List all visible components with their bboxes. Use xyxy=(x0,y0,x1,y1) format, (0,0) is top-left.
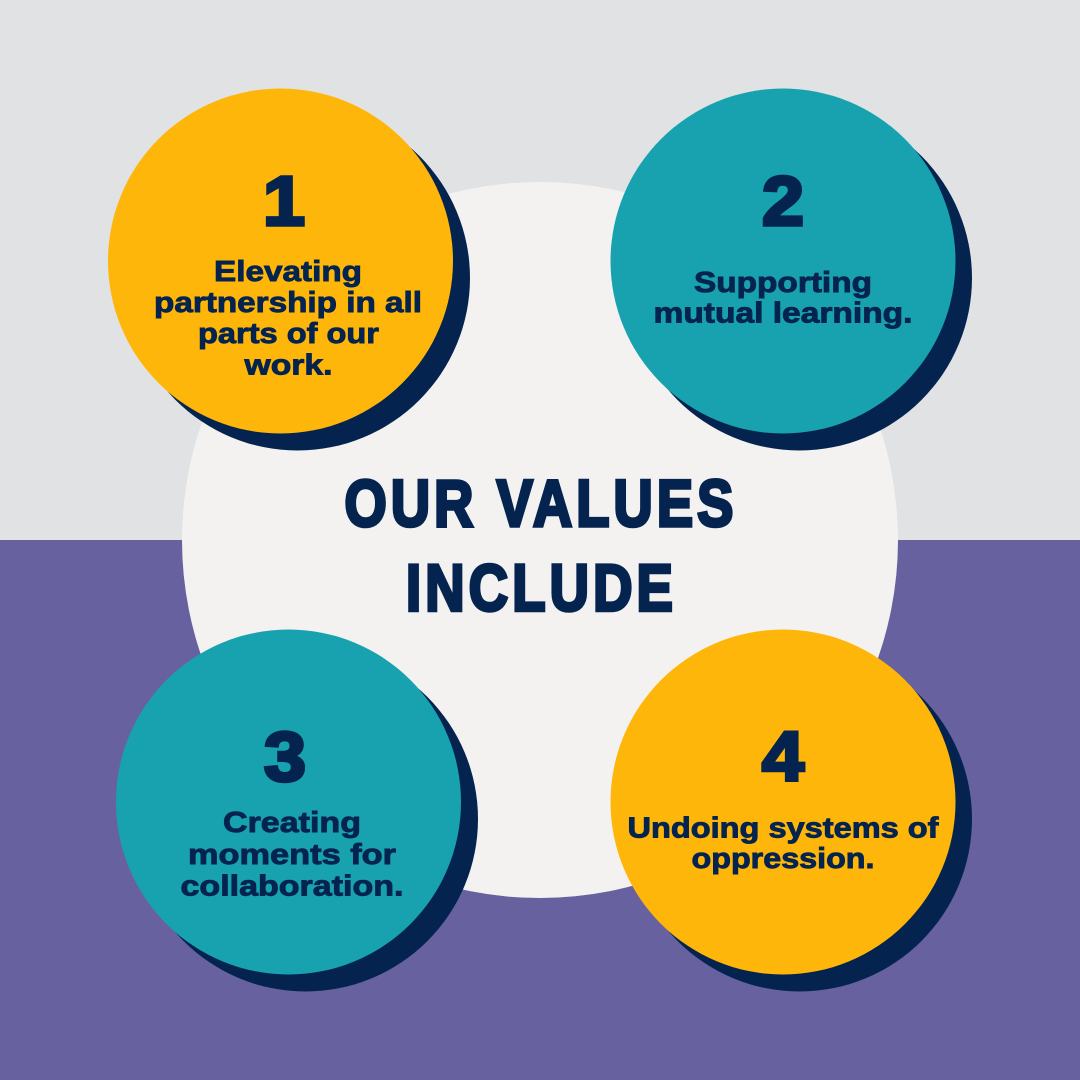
panel: value 1: partnership in all xyxy=(154,287,422,319)
panel: value 1: work. xyxy=(243,350,332,382)
panel: value 1: 1 xyxy=(263,162,305,240)
panel: value 4: oppression. xyxy=(692,843,874,875)
panel: value 2 xyxy=(610,88,972,450)
panel: value 2: 2 xyxy=(762,162,804,240)
title xyxy=(344,466,738,624)
panel: value 3: moments for xyxy=(188,839,396,871)
panel: value 3: 3 xyxy=(264,718,306,796)
panel: value 3: Creating xyxy=(223,807,361,839)
title: OUR VALUES xyxy=(344,466,738,540)
panel: value 3 xyxy=(116,630,478,992)
background: top grey band xyxy=(0,0,1080,540)
panel: value 1: Elevating xyxy=(214,256,362,288)
panel: value 1: parts of our xyxy=(198,318,379,350)
panel: value 2: Supporting xyxy=(694,267,872,299)
panel: value 4 xyxy=(610,630,972,992)
central circle xyxy=(182,182,898,898)
background: bottom purple band xyxy=(0,540,1080,1080)
title: INCLUDE xyxy=(406,550,677,624)
panel: value 1 xyxy=(108,88,470,450)
panel: value 4: Undoing systems of xyxy=(628,812,939,844)
panel: value 2: mutual learning. xyxy=(654,298,912,330)
panel: value 3: collaboration. xyxy=(180,870,404,902)
panel: value 4: 4 xyxy=(762,718,804,796)
